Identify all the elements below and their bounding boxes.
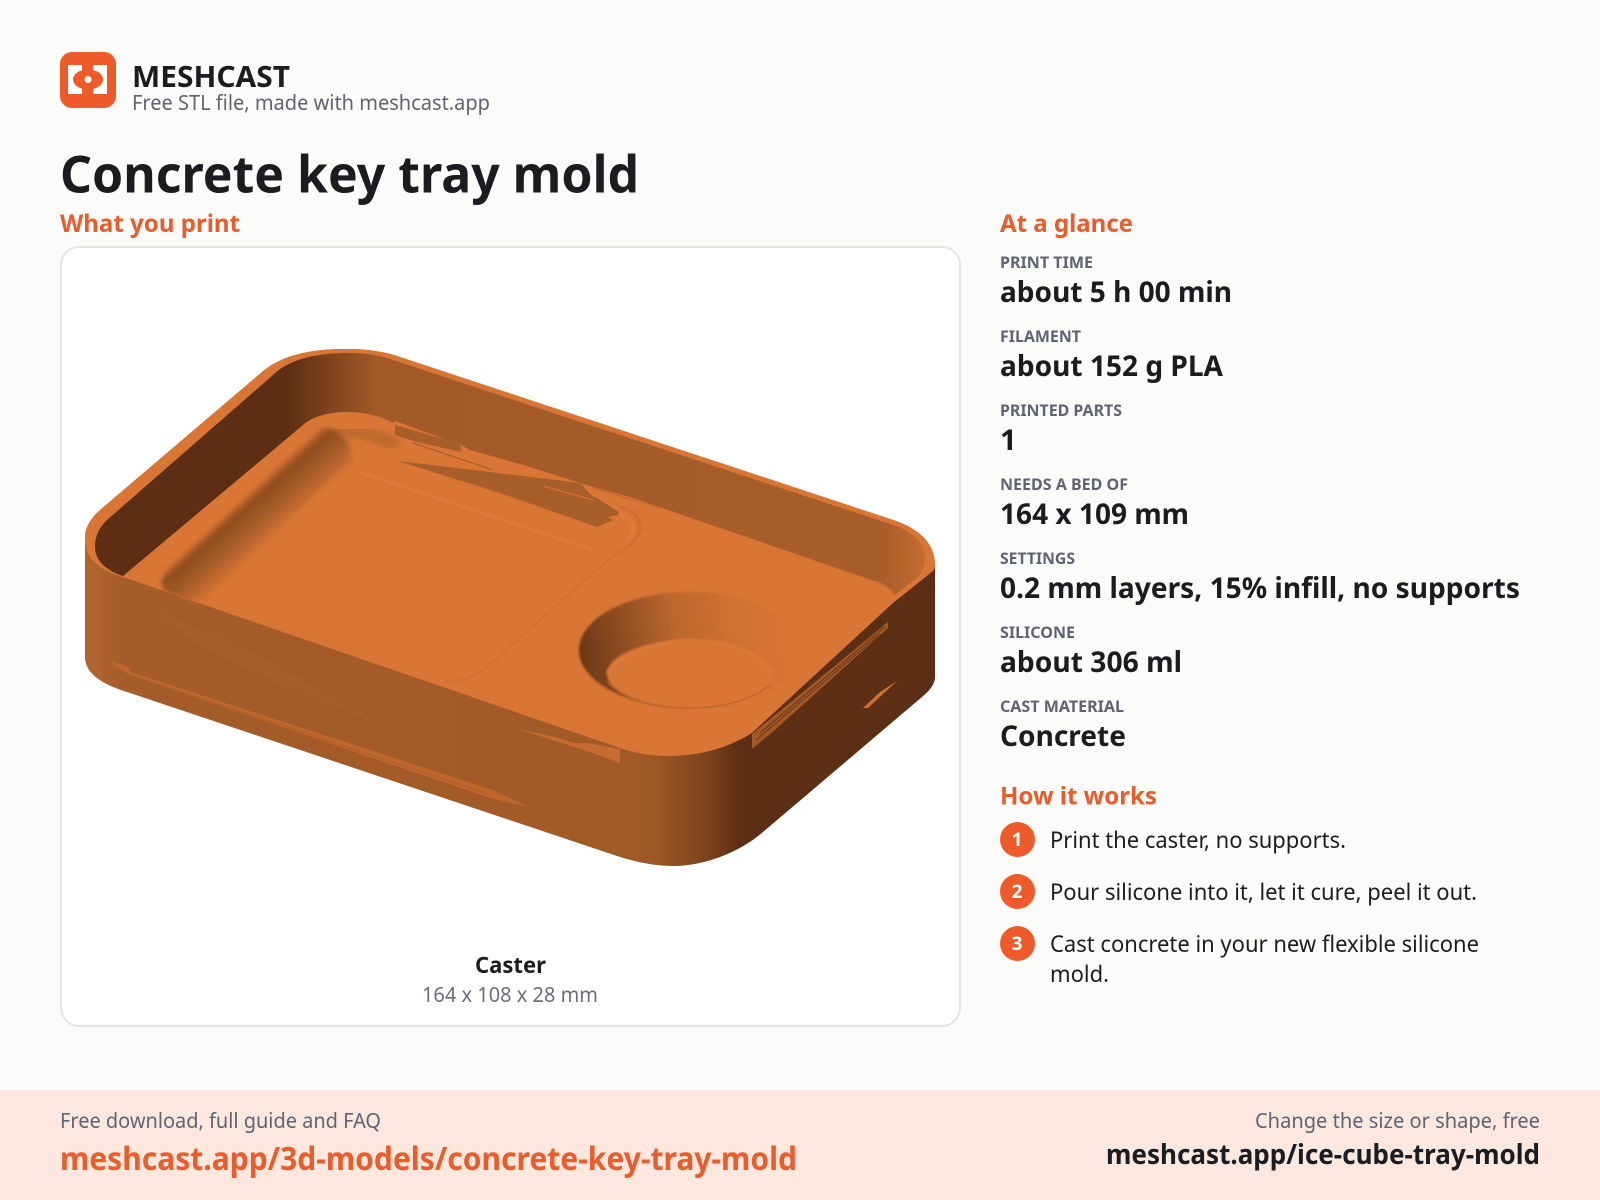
stat: filament: FILAMENT xyxy=(1000,324,1081,347)
stat: cast material: CAST MATERIAL xyxy=(1000,694,1124,717)
3D model: caster tray xyxy=(85,349,935,866)
round well xyxy=(579,592,801,708)
footer band xyxy=(0,1090,1600,1200)
stat: silicone: SILICONE xyxy=(1000,620,1075,643)
stat: printed parts: PRINTED PARTS xyxy=(1000,398,1122,421)
step 3: mold. xyxy=(1050,958,1109,989)
stat: silicone: about 306 ml xyxy=(1000,642,1182,681)
footer left link: meshcast.app/3d-models/concrete-key-tray-mold xyxy=(60,1137,797,1180)
footer right link: meshcast.app/ice-cube-tray-mold xyxy=(1106,1135,1540,1173)
panel: what you print xyxy=(61,247,960,1026)
front wall streaks xyxy=(107,661,528,807)
brown wedge behind recess xyxy=(398,461,619,527)
caption: part size: 164 x 108 x 28 mm xyxy=(422,981,598,1009)
title: Concrete key tray mold xyxy=(60,138,639,208)
recess back ridge xyxy=(356,471,593,550)
tray outer body xyxy=(85,349,935,866)
stat: bed size: NEEDS A BED OF xyxy=(1000,472,1128,495)
step 1: 1 xyxy=(1012,826,1022,852)
stat: print time: about 5 h 00 min xyxy=(1000,272,1232,311)
recess corner shading xyxy=(328,431,397,446)
right wall streaks xyxy=(752,622,888,749)
heading: what you print: What you print xyxy=(60,207,240,240)
step 1: Print the caster, no supports. xyxy=(1050,824,1346,855)
back wall block xyxy=(395,425,461,452)
stat: printed parts xyxy=(1000,398,1122,459)
stat: settings: SETTINGS xyxy=(1000,546,1075,569)
heading: how it works: How it works xyxy=(1000,780,1157,812)
header: brand xyxy=(60,52,490,117)
caption: part name: Caster xyxy=(475,950,546,980)
stat: print time xyxy=(1000,250,1232,311)
floor corner right xyxy=(877,582,895,595)
recess groove left xyxy=(162,428,352,602)
stat: filament: about 152 g PLA xyxy=(1000,346,1224,385)
stat: bed size: 164 x 109 mm xyxy=(1000,494,1189,533)
heading: at a glance: At a glance xyxy=(1000,207,1133,240)
stat: filament xyxy=(1000,324,1224,385)
stat: settings xyxy=(1000,546,1520,607)
icon: meshcast logo xyxy=(60,52,116,108)
step 2: 2 xyxy=(1012,878,1023,904)
brand name: MESHCAST xyxy=(132,55,290,96)
stat: cast material xyxy=(1000,694,1126,755)
stat: print time: PRINT TIME xyxy=(1000,250,1093,273)
stat: bed size xyxy=(1000,472,1189,533)
stat: cast material: Concrete xyxy=(1000,716,1126,755)
stat: printed parts: 1 xyxy=(1000,420,1017,459)
groove dark end xyxy=(164,579,182,591)
recess border line xyxy=(443,547,627,682)
step 3: 3 xyxy=(1012,930,1023,956)
inner walls xyxy=(95,353,925,595)
footer right label: Change the size or shape, free xyxy=(1255,1107,1540,1135)
footer left label: Free download, full guide and FAQ xyxy=(60,1107,381,1135)
recess right corner xyxy=(620,507,640,547)
brand tagline: Free STL file, made with meshcast.app xyxy=(132,89,490,117)
tray top face xyxy=(85,349,935,756)
step 3 xyxy=(1000,926,1479,989)
well floor xyxy=(607,640,773,708)
stat: silicone xyxy=(1000,620,1182,681)
step 2: Pour silicone into it, let it cure, peel it out. xyxy=(1050,876,1477,907)
step 3: Cast concrete in your new flexible silicone xyxy=(1050,928,1479,959)
stat: settings: 0.2 mm layers, 15% infill, no supports xyxy=(1000,568,1520,607)
